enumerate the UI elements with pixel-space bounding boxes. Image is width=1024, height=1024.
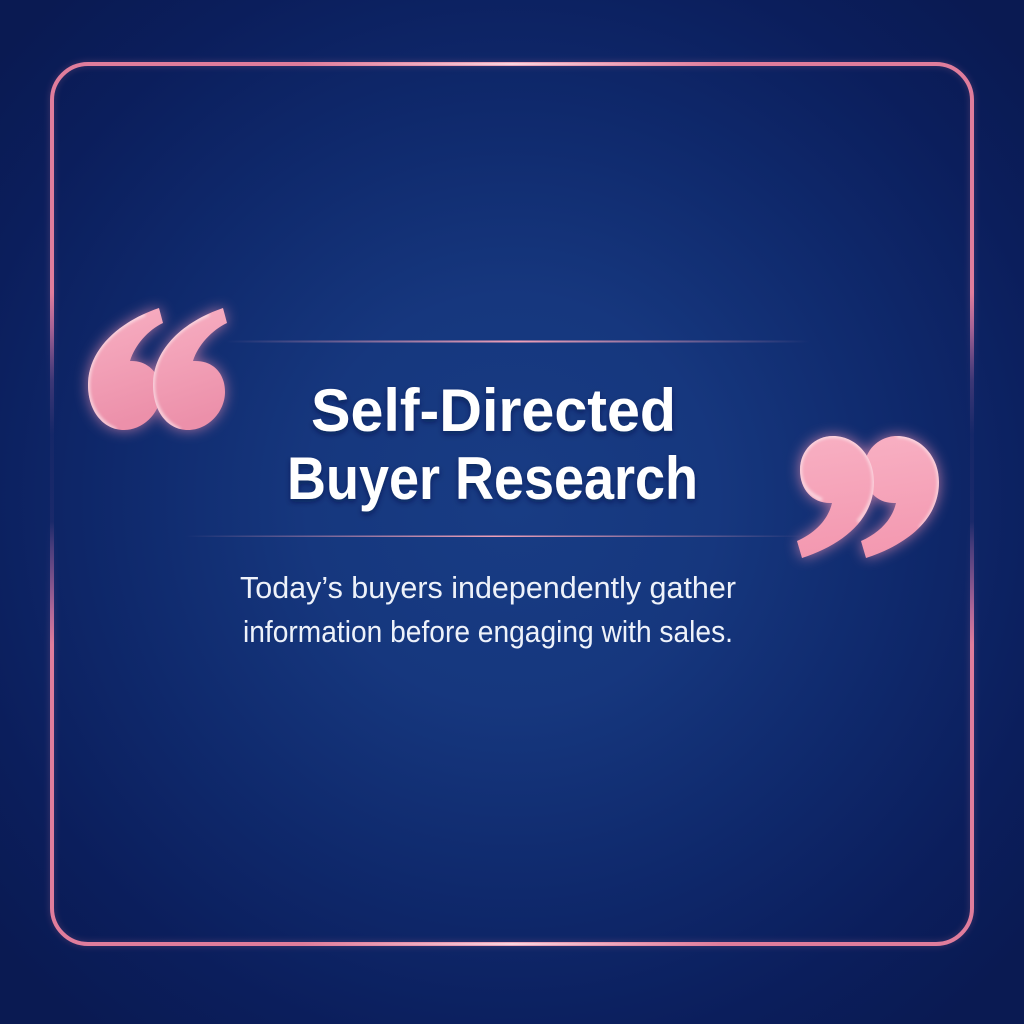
subtitle text: information before engaging with sales.	[243, 614, 733, 649]
title: Buyer Research	[287, 445, 698, 512]
bottom divider line	[185, 536, 805, 537]
icon: opening quotation mark	[88, 308, 227, 430]
title	[287, 377, 698, 512]
subtitle text: Today’s buyers independently gather	[240, 570, 736, 605]
icon: closing quotation mark	[797, 436, 939, 558]
title: Self-Directed	[311, 377, 676, 444]
subtitle text	[240, 570, 736, 649]
glowing rounded frame	[52, 62, 972, 946]
top divider line	[225, 340, 810, 342]
